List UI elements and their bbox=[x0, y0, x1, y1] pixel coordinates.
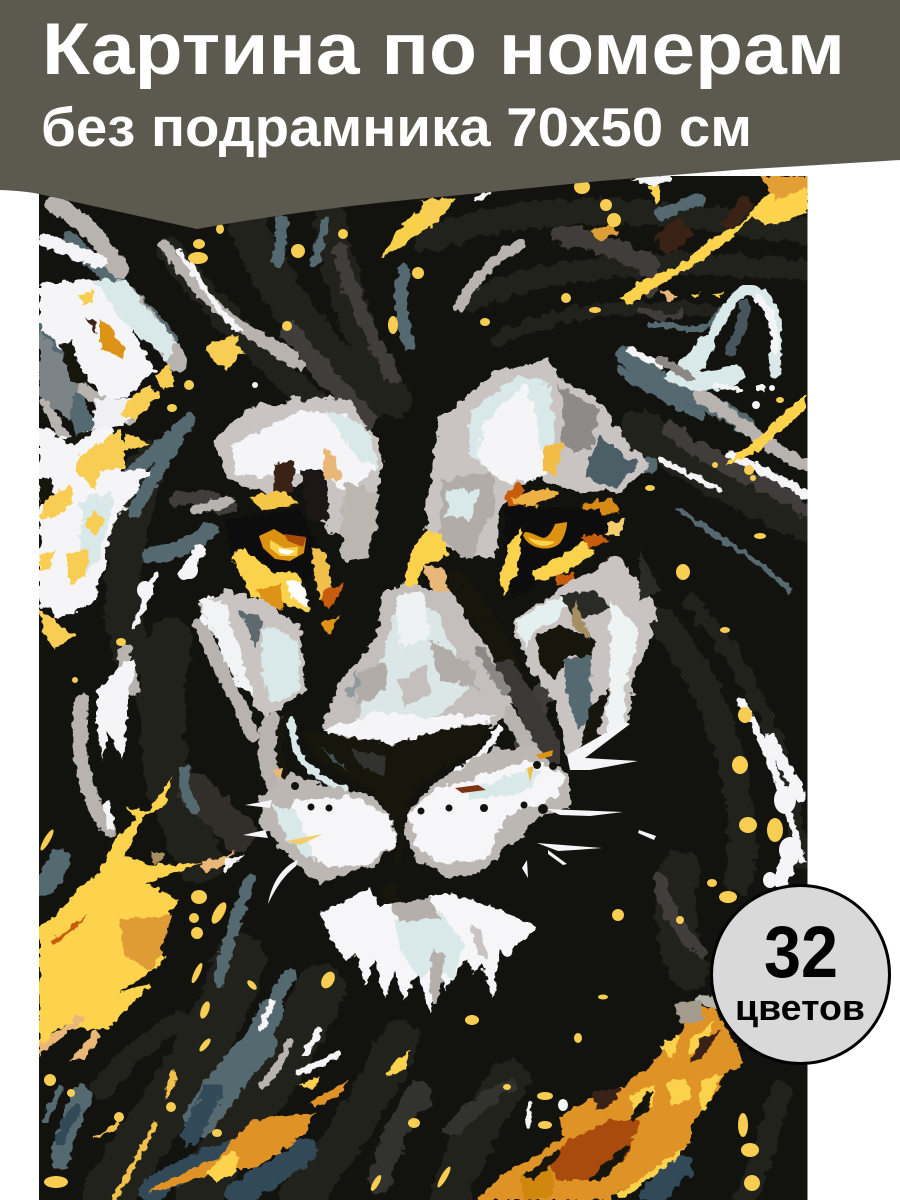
deep blue lower brushwork bbox=[60, 1090, 680, 1195]
muzzle accents bbox=[272, 750, 553, 845]
right ear bbox=[660, 290, 776, 390]
badge: 32 colors bbox=[712, 886, 890, 1064]
gold splash bottom center bbox=[95, 1050, 412, 1200]
forehead right gold marks bbox=[505, 442, 620, 520]
left cheek fur near eye bbox=[197, 590, 305, 720]
subtitle: без подрамника 70х50 см bbox=[41, 96, 752, 158]
black gaps in left fur bbox=[39, 340, 95, 505]
badge: 32 colors: цветов bbox=[735, 987, 865, 1028]
white flecks bbox=[137, 382, 801, 1111]
left cheek white streak bbox=[97, 660, 136, 832]
muzzle spots bbox=[291, 761, 557, 814]
arc around muzzle bbox=[280, 715, 500, 795]
nose bbox=[320, 724, 492, 841]
forehead left bbox=[214, 398, 385, 560]
gold splashes in left fur bbox=[39, 198, 450, 650]
right cheek dark patches bbox=[537, 550, 660, 750]
gold splash top right bbox=[380, 176, 808, 465]
gold splash lower left bbox=[39, 777, 245, 1060]
right cheek fur bbox=[513, 553, 657, 763]
forehead left dark and gold marks bbox=[249, 445, 342, 520]
nose bridge bbox=[322, 585, 515, 745]
gold flecks bbox=[38, 180, 784, 1192]
orange mark in left fur bbox=[85, 317, 125, 358]
chin bbox=[320, 883, 537, 1013]
left eye bbox=[259, 529, 306, 561]
dark crease beside bridge bbox=[455, 580, 555, 755]
light gray mane brushwork bbox=[45, 205, 805, 1085]
title: Картина по номерам bbox=[42, 9, 845, 90]
warm gray mane brushwork bbox=[180, 235, 805, 1180]
muzzle left bbox=[260, 772, 397, 887]
left white fur bbox=[39, 280, 175, 620]
whiskers bbox=[243, 722, 656, 904]
eye sockets bbox=[506, 504, 602, 522]
slate blue brushwork bbox=[44, 200, 790, 1160]
header banner bbox=[0, 0, 900, 229]
muzzle right bbox=[403, 745, 570, 877]
dark mane brushwork bbox=[100, 212, 805, 1198]
badge: 32 colors: 32 bbox=[764, 912, 838, 993]
gold splash bottom right bbox=[477, 1000, 743, 1200]
white mane streaks bbox=[45, 178, 805, 1127]
forehead right bbox=[425, 360, 650, 560]
right eye bbox=[523, 522, 567, 549]
painting: lion portrait bbox=[38, 176, 808, 1200]
gold around eyes bbox=[232, 518, 625, 635]
